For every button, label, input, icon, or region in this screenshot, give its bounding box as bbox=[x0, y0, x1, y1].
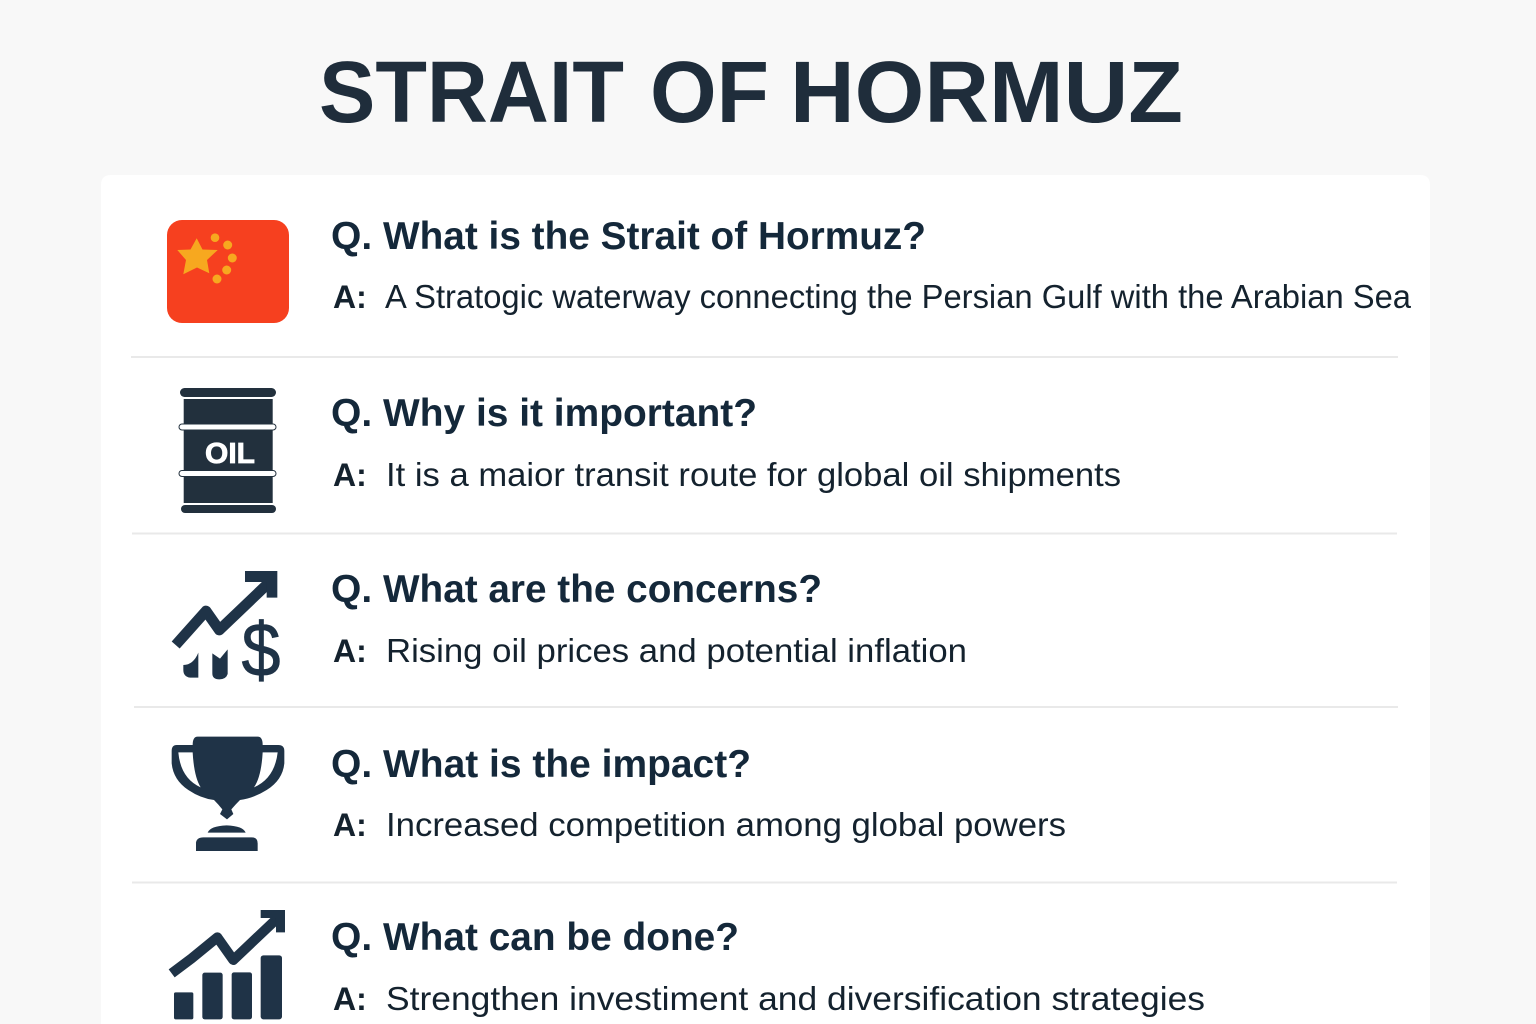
answer 2: It is a maior transit route for global oil shipments bbox=[386, 456, 1121, 493]
row 5: what can be done bbox=[172, 910, 1205, 1019]
row 4: impact bbox=[172, 737, 1066, 851]
icon: rising price chart with drops and dollar bbox=[176, 571, 280, 693]
title: OF bbox=[650, 44, 769, 141]
title bbox=[319, 44, 1183, 141]
question 3: What are the concerns? bbox=[383, 568, 822, 611]
question 4: What is the impact? bbox=[383, 743, 751, 786]
question 2: Q. bbox=[331, 392, 372, 435]
answer 3: Rising oil prices and potential inflation bbox=[386, 632, 967, 669]
question 1: Q. bbox=[331, 215, 372, 258]
answer 1: A: bbox=[333, 279, 367, 315]
row 3: concerns bbox=[176, 568, 967, 693]
panel: Q and A card bbox=[101, 175, 1430, 1024]
icon: oil barrel: OIL bbox=[205, 438, 255, 470]
answer 4: A: bbox=[333, 807, 367, 843]
question 5: What can be done? bbox=[383, 916, 739, 959]
answer 5: Strengthen investiment and diversification strategies bbox=[386, 980, 1205, 1017]
icon: oil barrel bbox=[179, 388, 276, 513]
icon: rising price chart with drops and dollar: $ bbox=[242, 608, 280, 693]
answer 4: Increased competition among global powers bbox=[386, 806, 1066, 843]
question 5: Q. bbox=[331, 916, 372, 959]
title: STRAIT bbox=[319, 44, 624, 141]
icon: China flag bbox=[167, 220, 289, 323]
icon: trophy bbox=[172, 737, 284, 851]
answer 3: A: bbox=[333, 633, 367, 669]
question 1: What is the Strait of Hormuz? bbox=[383, 215, 926, 258]
icon: growth bar chart with arrow bbox=[172, 910, 285, 1019]
answer 5: A: bbox=[333, 981, 367, 1017]
row 2: why important bbox=[179, 388, 1121, 513]
question 3: Q. bbox=[331, 568, 372, 611]
question 2: Why is it important? bbox=[383, 392, 757, 435]
question 4: Q. bbox=[331, 743, 372, 786]
answer 2: A: bbox=[333, 457, 367, 493]
title: HORMUZ bbox=[790, 44, 1183, 141]
row 1: what is the strait bbox=[167, 215, 1412, 323]
answer 1: A Stratogic waterway connecting the Persian Gulf with the Arabian Sea bbox=[385, 278, 1412, 315]
